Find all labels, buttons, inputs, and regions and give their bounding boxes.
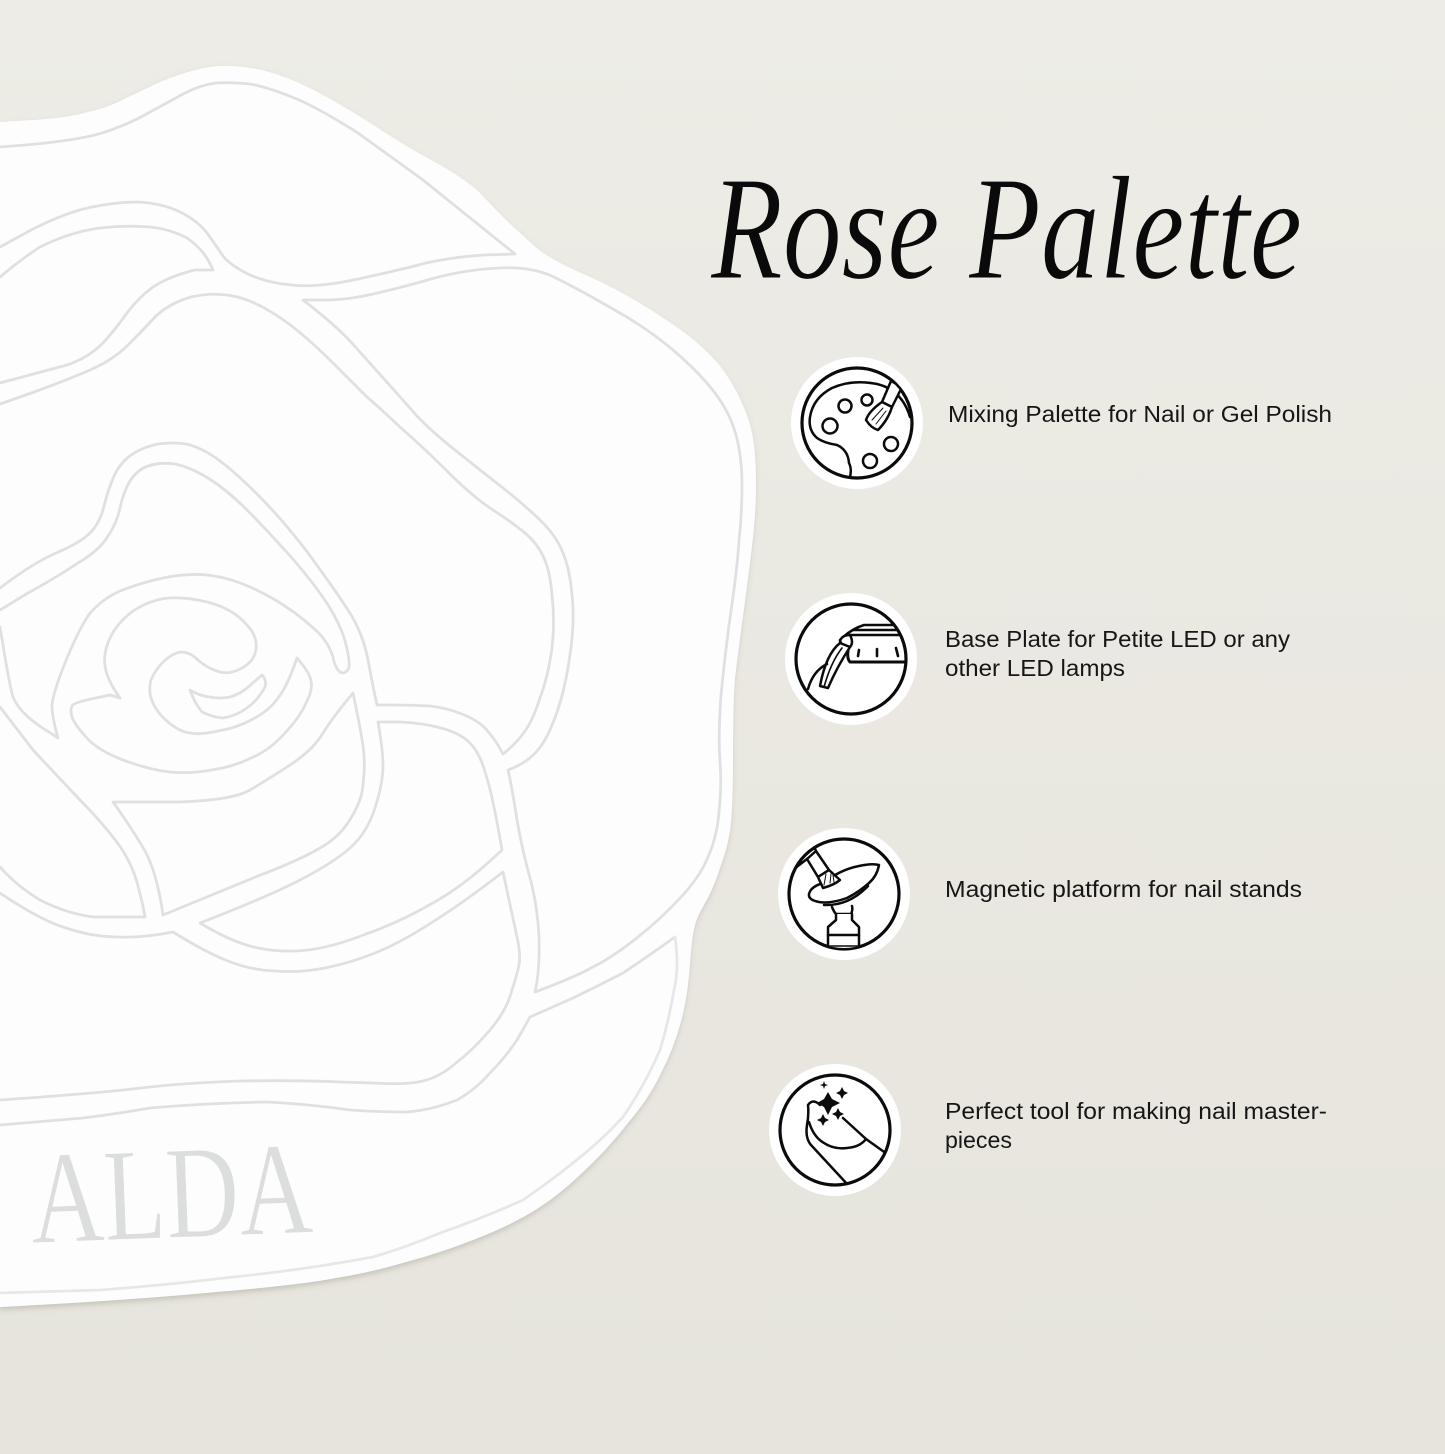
text: perfect tool second line: pieces — [945, 1127, 1012, 1153]
icon: finger with sparkling nail — [769, 1064, 901, 1196]
text: base plate second line: other LED lamps — [945, 655, 1125, 681]
icon: nail tip stand and brush — [778, 828, 910, 960]
icon: paint palette and brush — [791, 357, 923, 489]
text: magnetic platform: Magnetic platform for nail stands — [945, 876, 1302, 902]
title: Rose Palette — [710, 147, 1302, 311]
icon: LED lamp over finger — [785, 593, 917, 725]
panel: rose palette product — [0, 66, 756, 1307]
palette outer shape — [0, 66, 756, 1307]
engraved ALDA logo: ALDA — [27, 1114, 315, 1272]
text: perfect tool: Perfect tool for making nail master- — [945, 1098, 1327, 1124]
text: mixing palette: Mixing Palette for Nail or Gel Polish — [948, 401, 1332, 427]
text: base plate: Base Plate for Petite LED or any — [945, 626, 1290, 652]
rose line engraving — [0, 83, 742, 1293]
